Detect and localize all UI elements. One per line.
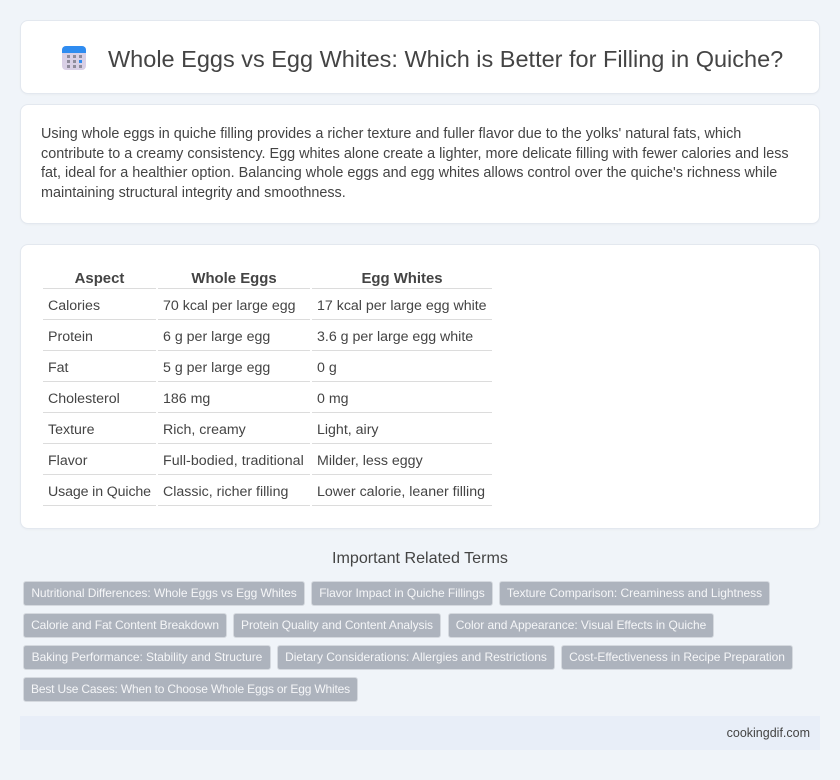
row: flavor: Full-bodied, traditional bbox=[163, 453, 304, 469]
text block: intro paragraph: fat, ideal for a healthier option. Balancing whole eggs and egg whites allows control over the quiche's richness while bbox=[41, 165, 777, 181]
heading: related terms: Important Related Terms bbox=[332, 549, 508, 567]
row: protein: Protein bbox=[48, 329, 93, 345]
row: texture bbox=[43, 422, 492, 444]
text block: intro paragraph: contribute to a creamy consistency. Egg whites alone create a lighter, more delicate filling with fewer calories and less bbox=[41, 146, 789, 162]
text block: intro paragraph bbox=[41, 126, 789, 201]
tag list: related terms: Nutritional Differences: Whole Eggs vs Egg Whites bbox=[31, 586, 297, 600]
table header: Egg Whites bbox=[361, 271, 443, 287]
row: cholesterol: Cholesterol bbox=[48, 391, 120, 407]
row: texture: Light, airy bbox=[317, 422, 379, 438]
text block: intro paragraph: Using whole eggs in quiche filling provides a richer texture and fuller flavor due to the yolks' natural fats, which bbox=[41, 126, 741, 142]
icon: calendar bbox=[62, 46, 86, 70]
row: fat: 5 g per large egg bbox=[163, 360, 270, 376]
footer bar bbox=[20, 716, 820, 750]
row: fat: 0 g bbox=[317, 360, 337, 376]
tag list: related terms: Cost-Effectiveness in Recipe Preparation bbox=[569, 650, 785, 664]
title: Whole Eggs vs Egg Whites: Which is Better for Filling in Quiche? bbox=[108, 46, 783, 72]
row: flavor: Milder, less eggy bbox=[317, 453, 423, 469]
row: calories: Calories bbox=[48, 298, 100, 314]
table header bbox=[43, 271, 492, 289]
tag list: related terms: Color and Appearance: Visual Effects in Quiche bbox=[456, 618, 706, 632]
row: cholesterol bbox=[43, 391, 492, 413]
row: texture: Rich, creamy bbox=[163, 422, 246, 438]
tag list: related terms: Best Use Cases: When to Choose Whole Eggs or Egg Whites bbox=[31, 682, 350, 696]
tag list: related terms: Texture Comparison: Creaminess and Lightness bbox=[507, 586, 762, 600]
row: usage in quiche bbox=[43, 484, 492, 506]
text block: intro paragraph: maintaining structural integrity and smoothness. bbox=[41, 185, 346, 201]
row: fat: Fat bbox=[48, 360, 68, 376]
table header: Aspect bbox=[75, 271, 124, 287]
row: calories: 17 kcal per large egg white bbox=[317, 298, 487, 314]
panel: comparison table bbox=[20, 244, 820, 529]
footer source text: cookingdif.com bbox=[727, 726, 810, 740]
tag list: related terms: Protein Quality and Content Analysis bbox=[241, 618, 433, 632]
panel: intro text bbox=[20, 104, 820, 224]
row: protein: 6 g per large egg bbox=[163, 329, 270, 345]
row: protein bbox=[43, 329, 492, 351]
row: calories bbox=[43, 298, 492, 320]
row: usage in quiche: Usage in Quiche bbox=[48, 484, 151, 500]
row: cholesterol: 186 mg bbox=[163, 391, 210, 407]
row: usage in quiche: Classic, richer filling bbox=[163, 484, 288, 500]
tag list: related terms: Dietary Considerations: Allergies and Restrictions bbox=[285, 650, 547, 664]
row: protein: 3.6 g per large egg white bbox=[317, 329, 473, 345]
tag list: related terms bbox=[23, 581, 793, 702]
panel: title header bbox=[20, 20, 820, 94]
table header: Whole Eggs bbox=[191, 271, 277, 287]
row: flavor: Flavor bbox=[48, 453, 87, 469]
tag list: related terms: Calorie and Fat Content Breakdown bbox=[31, 618, 219, 632]
row: usage in quiche: Lower calorie, leaner filling bbox=[317, 484, 485, 500]
row: calories: 70 kcal per large egg bbox=[163, 298, 296, 314]
tag list: related terms: Baking Performance: Stability and Structure bbox=[32, 650, 262, 664]
row: cholesterol: 0 mg bbox=[317, 391, 349, 407]
tag list: related terms: Flavor Impact in Quiche Fillings bbox=[319, 586, 485, 600]
row: fat bbox=[43, 360, 492, 382]
row: texture: Texture bbox=[48, 422, 95, 438]
row: flavor bbox=[43, 453, 492, 475]
